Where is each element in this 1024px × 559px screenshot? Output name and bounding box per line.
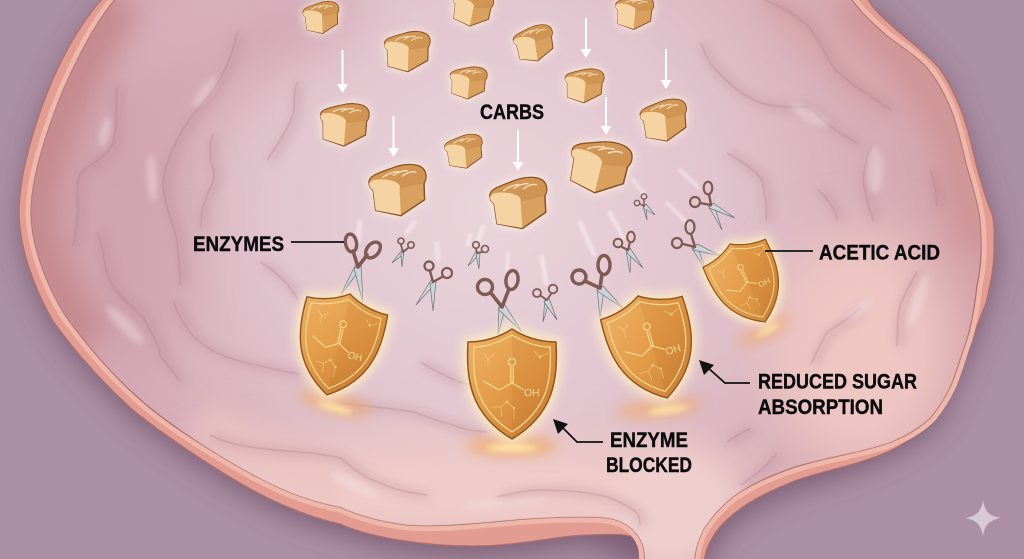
label: enzyme blocked: ENZYME <box>610 428 688 452</box>
floor glow 3 <box>615 393 705 423</box>
scissors 2 <box>392 238 414 267</box>
bread 13 <box>564 134 634 199</box>
bread 8 <box>319 102 370 147</box>
floor glow 4 <box>735 310 795 352</box>
bread 1 <box>302 1 340 34</box>
motion trails <box>358 170 698 283</box>
floor glow 1 <box>295 383 375 423</box>
label: reduced sugar absorption: REDUCED SUGAR <box>758 370 917 394</box>
bread 2 <box>450 0 495 29</box>
shield 2 <box>468 329 556 439</box>
arrow <box>388 116 399 157</box>
shield 4: OH <box>757 276 772 289</box>
bread 10 <box>444 133 485 170</box>
arrow <box>580 18 592 58</box>
scissors 11 <box>672 220 721 271</box>
arrow: enzyme blocked <box>553 419 603 442</box>
label: enzyme blocked: BLOCKED <box>606 453 692 477</box>
arrow <box>512 130 524 171</box>
label: enzymes: ENZYMES <box>193 232 284 256</box>
white arrows: carbs descending <box>337 18 672 171</box>
bread 12 <box>489 176 550 231</box>
scissors 7 <box>572 256 623 318</box>
carbs: bread loaves <box>302 0 690 231</box>
scissors 10 <box>690 182 735 230</box>
label: reduced sugar absorption: ABSORPTION <box>758 395 883 419</box>
leader: acetic acid <box>765 250 813 252</box>
scissors 9 <box>634 194 655 220</box>
sparkle watermark <box>965 500 1001 536</box>
shield 3: OH <box>665 343 682 358</box>
scissors 1 <box>340 233 383 303</box>
arrow <box>337 50 348 93</box>
bread 4 <box>384 32 430 72</box>
arrow <box>600 97 612 135</box>
bread 5 <box>512 23 557 64</box>
shield 1: OH <box>346 350 363 364</box>
shield 3 <box>597 284 708 410</box>
scissors 5 <box>478 270 522 335</box>
bread 3 <box>614 0 654 31</box>
bread 6 <box>449 65 488 100</box>
scissors 3 <box>416 262 452 311</box>
label: acetic acid: ACETIC ACID <box>819 240 940 264</box>
bread 7 <box>564 68 605 104</box>
floor glow 2 <box>466 435 558 457</box>
scissors 8 <box>614 232 643 273</box>
shield 2: OH <box>524 387 540 399</box>
label: carbs: CARBS <box>480 100 544 124</box>
acid shields <box>286 230 797 457</box>
bread 11 <box>368 163 429 218</box>
shield 1 <box>286 285 391 404</box>
shield 4 <box>699 230 797 336</box>
bread 9 <box>639 98 690 143</box>
enzymes: scissors <box>340 182 735 335</box>
scissors 4 <box>468 242 488 269</box>
leader: enzymes <box>291 241 344 243</box>
arrow <box>660 49 672 89</box>
arrow: reduced sugar absorption <box>699 360 750 383</box>
scissors 6 <box>533 285 557 322</box>
